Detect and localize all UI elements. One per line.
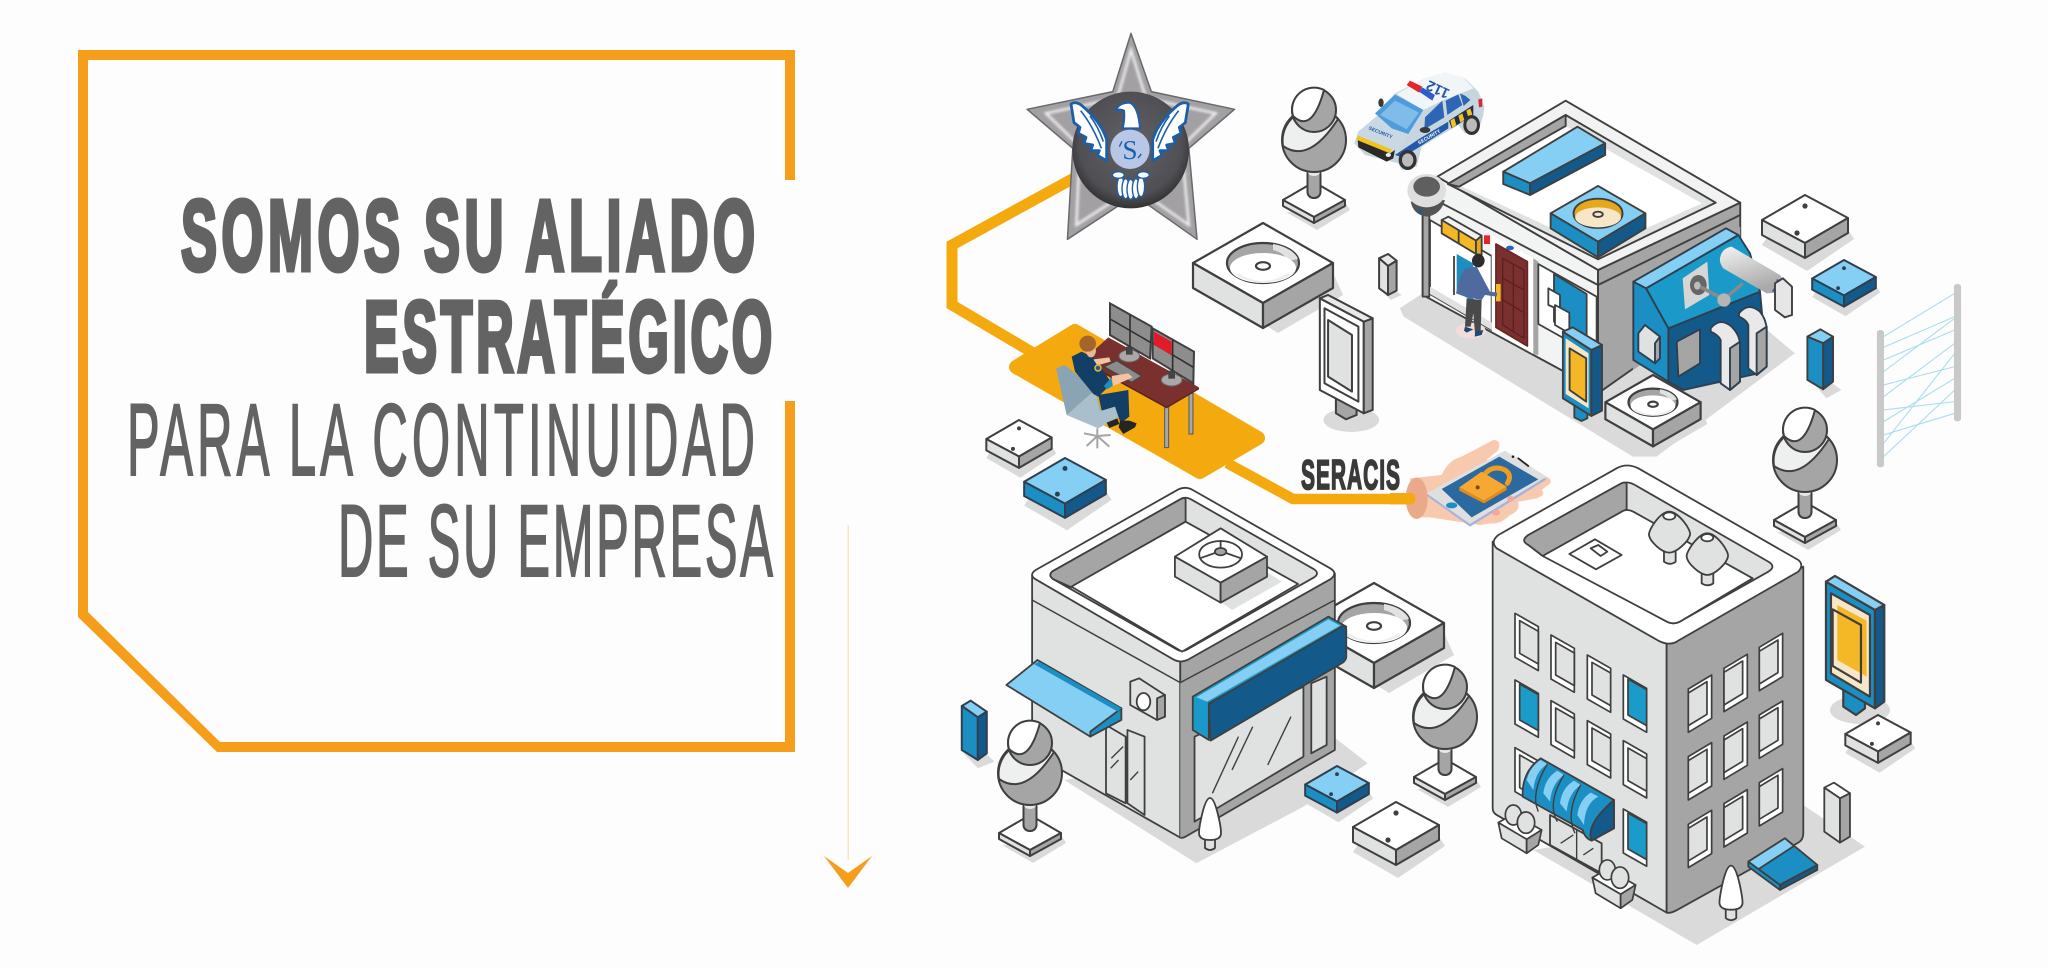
right wall [1180,573,1335,838]
left wall [1423,177,1598,390]
ground shadow [1064,738,1368,863]
white post right [1824,783,1850,843]
small box [1638,325,1660,363]
white post by annex [1775,278,1792,317]
door sign [1506,246,1514,250]
roof [1494,465,1801,644]
logo star [1027,33,1235,239]
guard [1072,336,1137,434]
ramp [1748,838,1817,890]
shop door [1550,815,1602,873]
panel [1677,329,1700,377]
left awning [1006,660,1121,737]
small tree at store corner [1199,798,1221,850]
blue standing sign [1563,327,1602,421]
wrist [1406,478,1428,519]
wall band line [1032,600,1335,683]
red alarm box [1484,235,1490,244]
connector line from logo to platform [952,172,1085,357]
camera arm [1700,283,1743,307]
small fan unit, right building [1605,375,1707,450]
connector cap [1390,493,1415,504]
left windows [1515,613,1647,866]
small white post [1379,254,1402,300]
white box, right [1762,195,1854,271]
blue annex placeholder shadow [1633,227,1740,370]
white billboard [1320,295,1379,432]
title text block [127,180,773,598]
tail light [1478,98,1482,107]
side windows [1424,101,1444,129]
tree near fence [1773,408,1841,550]
camera lens [1773,279,1777,292]
white box, far right [1845,715,1915,773]
right wall [1667,567,1803,913]
blue annex [1633,228,1782,390]
door [1106,725,1145,815]
phone in hand [1390,440,1551,527]
striped awning [1523,758,1614,841]
right planter [1592,860,1636,908]
rooftop blue fan [1551,186,1645,257]
laser fence [1877,284,1961,467]
left wall [1032,575,1180,838]
padlock [1459,468,1510,503]
hood lettering: SECURITY [1368,126,1394,141]
windshield [1375,94,1423,134]
right building accessories [1563,278,1961,467]
operator platform [1016,331,1258,472]
right side window [1538,264,1597,357]
title line: somos su aliado: SOMOS SU ALIADO [181,180,755,292]
arch bollards [1711,307,1767,390]
door [1496,244,1527,346]
shop window [1195,677,1327,822]
tree near logo [1282,88,1350,230]
hood [1358,115,1408,153]
entrance facade [1407,174,1597,357]
left planter [1498,805,1542,853]
subtitle line: para la continuidad: PARA LA CONTINUIDAD [127,383,755,497]
blue box, right [1812,260,1880,316]
desk [1083,337,1199,448]
security operator at desk [1056,303,1199,448]
tree right of store [1413,665,1481,807]
roof vents [1649,512,1728,585]
corner shade [1180,673,1196,838]
roof number: 112 [1424,76,1452,101]
rooftop fan [1175,528,1282,610]
subtitle line: de su empresa: DE SU EMPRESA [338,484,773,598]
tail feathers [1112,172,1149,199]
wheels [1399,150,1417,170]
right windows [1688,633,1783,868]
eagle head [1116,103,1140,128]
thief [1456,254,1497,339]
roof hatch [1569,539,1622,569]
office building [1493,465,1865,945]
rooftop blue box [1503,127,1605,195]
alarm screen [1154,332,1172,355]
left wing [1071,103,1107,161]
store building [1006,488,1368,863]
wall light box [1130,678,1165,720]
blue window glass [1457,254,1473,302]
hand [1410,440,1551,525]
right wall [1598,203,1740,393]
phone [1427,451,1547,527]
front grille [1358,139,1395,162]
seal ticks [1119,141,1141,158]
police car [1354,73,1484,170]
white box, upper left [986,420,1056,478]
dome camera [1407,174,1446,217]
blue box, upper left [1024,458,1112,530]
ground shadow [1533,805,1865,945]
right wing [1153,103,1188,161]
corner pillar [1423,213,1429,297]
keyboard [1104,361,1142,382]
top right building [1400,101,1795,457]
store sign [1193,617,1346,741]
door surround [1492,235,1533,354]
sphere [1072,92,1189,208]
camera body [1720,247,1782,293]
annex faces [1668,292,1767,390]
orange title frame [78,50,795,752]
rooftop fan unit, centre [1193,223,1343,333]
fan unit behind store [1304,583,1454,693]
small tree at office corner [1719,866,1743,920]
scroll arrow [824,525,872,888]
blue post, left [962,701,995,768]
seracis label: SERACIS [1301,452,1400,499]
roof [1397,73,1473,110]
yellow side chevrons [1449,105,1473,128]
chair [1056,365,1125,448]
door lettering: SECURITY [1417,128,1442,146]
window frame [1453,256,1455,295]
logo sphere and eagle [1071,92,1189,208]
fingers [1492,496,1514,516]
small blue post [1807,329,1841,398]
ground shadow [1400,293,1795,457]
blue box, store front [1305,766,1373,822]
blue and yellow billboard [1826,576,1890,724]
blue side stripe [1395,122,1448,157]
yellow sign [1442,217,1482,255]
roof [1423,101,1740,285]
seal [1110,130,1150,169]
left window [1430,220,1492,330]
door handle [1496,284,1501,301]
car body [1354,73,1484,170]
title line: estratégico: ESTRATÉGICO [364,281,772,392]
light bar [1407,81,1422,93]
wall plate [1683,262,1709,309]
roof [1032,488,1334,661]
left wall [1493,542,1667,913]
mirrors [1378,98,1384,107]
seal letter: S [1122,135,1138,165]
white box, store front [1353,802,1445,878]
monitors [1110,303,1194,386]
connector line to phone [1227,463,1414,499]
tree left of store [998,721,1066,863]
